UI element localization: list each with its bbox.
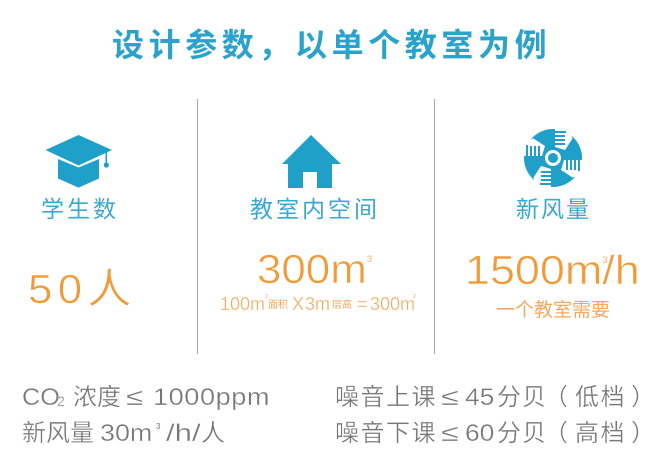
CO2 spec: CO [22,384,60,411]
label: fresh air: 新风量 [516,196,591,222]
airflow per person spec: /h/ [166,420,201,447]
noise in class: 噪音上课 [335,384,437,411]
CO2 spec: 2 [57,393,65,409]
noise in class: ） [631,384,655,411]
noise after class: （ [544,420,568,447]
noise in class [335,384,655,411]
noise in class: 分贝 [497,384,547,411]
noise in class: （ [544,384,568,411]
noise after class: 分贝 [497,420,547,447]
noise after class: ） [631,420,655,447]
airflow per person spec [22,420,225,447]
formula: volume: 3m [305,294,330,314]
formula: volume: 2 [265,294,268,300]
value: students: 50人 [28,266,137,312]
panel: classroom space: 3 [367,254,372,264]
noise in class: 45 [465,384,494,411]
value: volume: 300m [257,246,367,292]
icon: graduation cap [46,135,112,188]
airflow per person spec: 新风量 [22,420,94,447]
formula: volume: 2 [413,294,416,300]
panel: classroom space [220,135,416,314]
value: airflow: 1500m/h [465,247,640,293]
icon: house [282,135,341,188]
noise in class: 低档 [575,384,626,411]
note: one classroom: 一个教室需要 [496,300,610,321]
airflow per person spec: 人 [201,420,225,447]
formula: volume: X [292,294,304,314]
title: 设计参数，以单个教室为例 [112,27,551,63]
airflow per person spec: 3 [156,422,160,431]
CO2 spec: 1000ppm [153,384,270,411]
panel: students [28,135,137,312]
noise after class: 噪音下课 [335,420,437,447]
panel: fresh air [465,129,640,321]
CO2 spec [22,384,270,411]
value: airflow: 3 [602,255,608,265]
label: students: 学生数 [41,196,119,222]
label: classroom space: 教室内空间 [250,196,380,222]
formula: volume: 100m [220,294,265,314]
noise after class: 60 [465,420,494,447]
footer: right specs [335,384,655,447]
formula: volume [220,294,416,314]
formula: volume: 层高 [332,300,352,311]
formula: volume: 面积 [268,300,288,311]
footer: left specs [22,384,270,447]
noise after class: 高档 [575,420,626,447]
formula: volume: 300m [370,294,415,314]
noise after class: ≤ [441,420,459,447]
CO2 spec: 浓度 [73,384,121,411]
CO2 spec: ≤ [126,384,143,411]
airflow per person spec: 30m [100,420,152,447]
formula: volume: = [357,294,368,314]
noise after class [335,420,655,447]
noise in class: ≤ [441,384,459,411]
icon: fan [524,129,582,187]
